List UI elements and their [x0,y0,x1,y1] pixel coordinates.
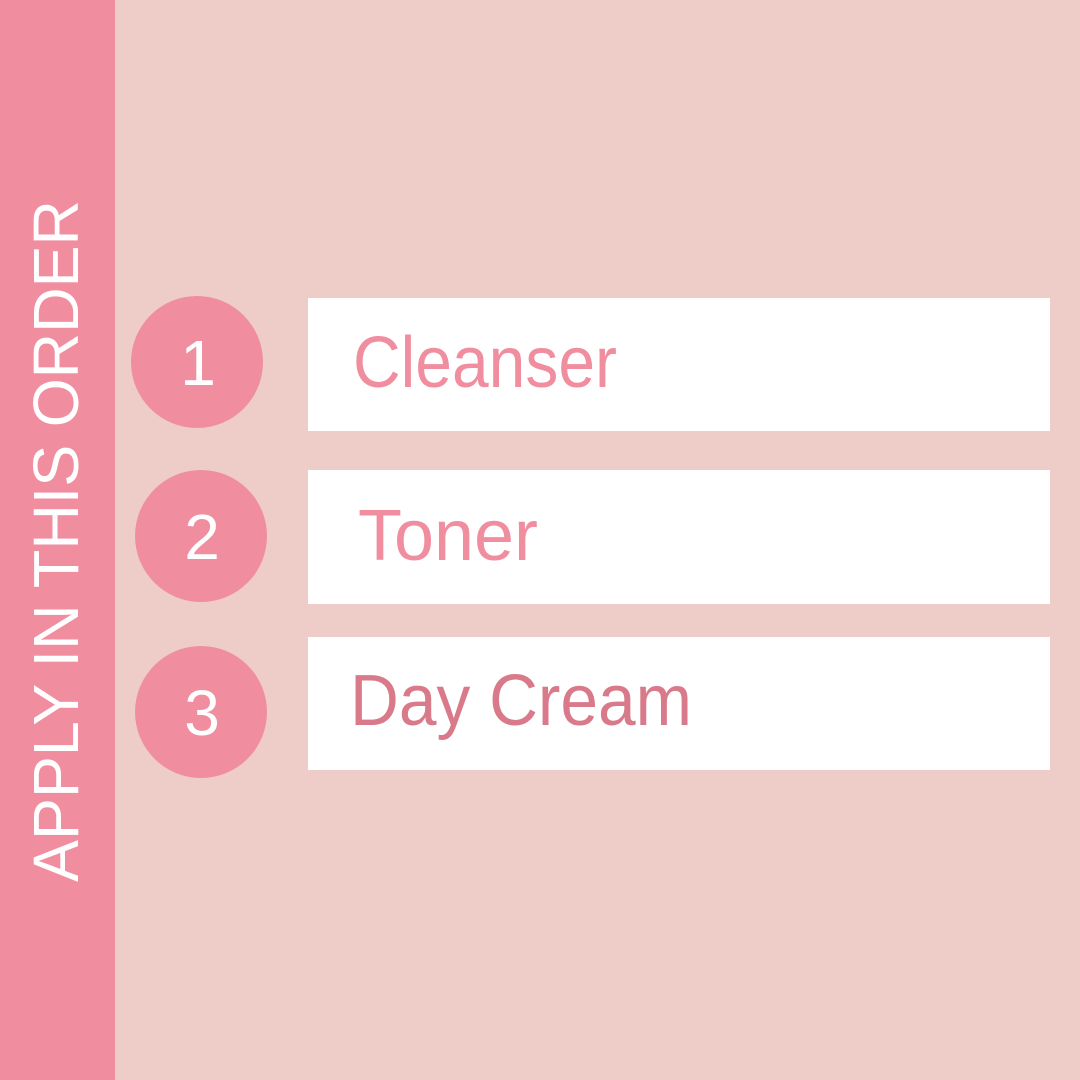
box: Toner: Toner [358,496,538,576]
number badge 2 [135,470,267,602]
number badge 3: 3 [184,677,220,749]
step 2 [135,470,1050,604]
box: Day Cream: Day Cream [350,661,692,741]
number badge 1: 1 [180,327,216,399]
step 1 [131,296,1050,431]
step 3 [135,637,1050,778]
number badge 2: 2 [184,501,220,573]
vertical title: APPLY IN THIS ORDER [20,200,92,882]
box: Day Cream [308,637,1050,770]
box: Toner [308,470,1050,604]
sidebar [0,0,115,1080]
box: Cleanser: Cleanser [353,323,617,403]
number badge 3 [135,646,267,778]
number badge 1 [131,296,263,428]
box: Cleanser [308,298,1050,431]
